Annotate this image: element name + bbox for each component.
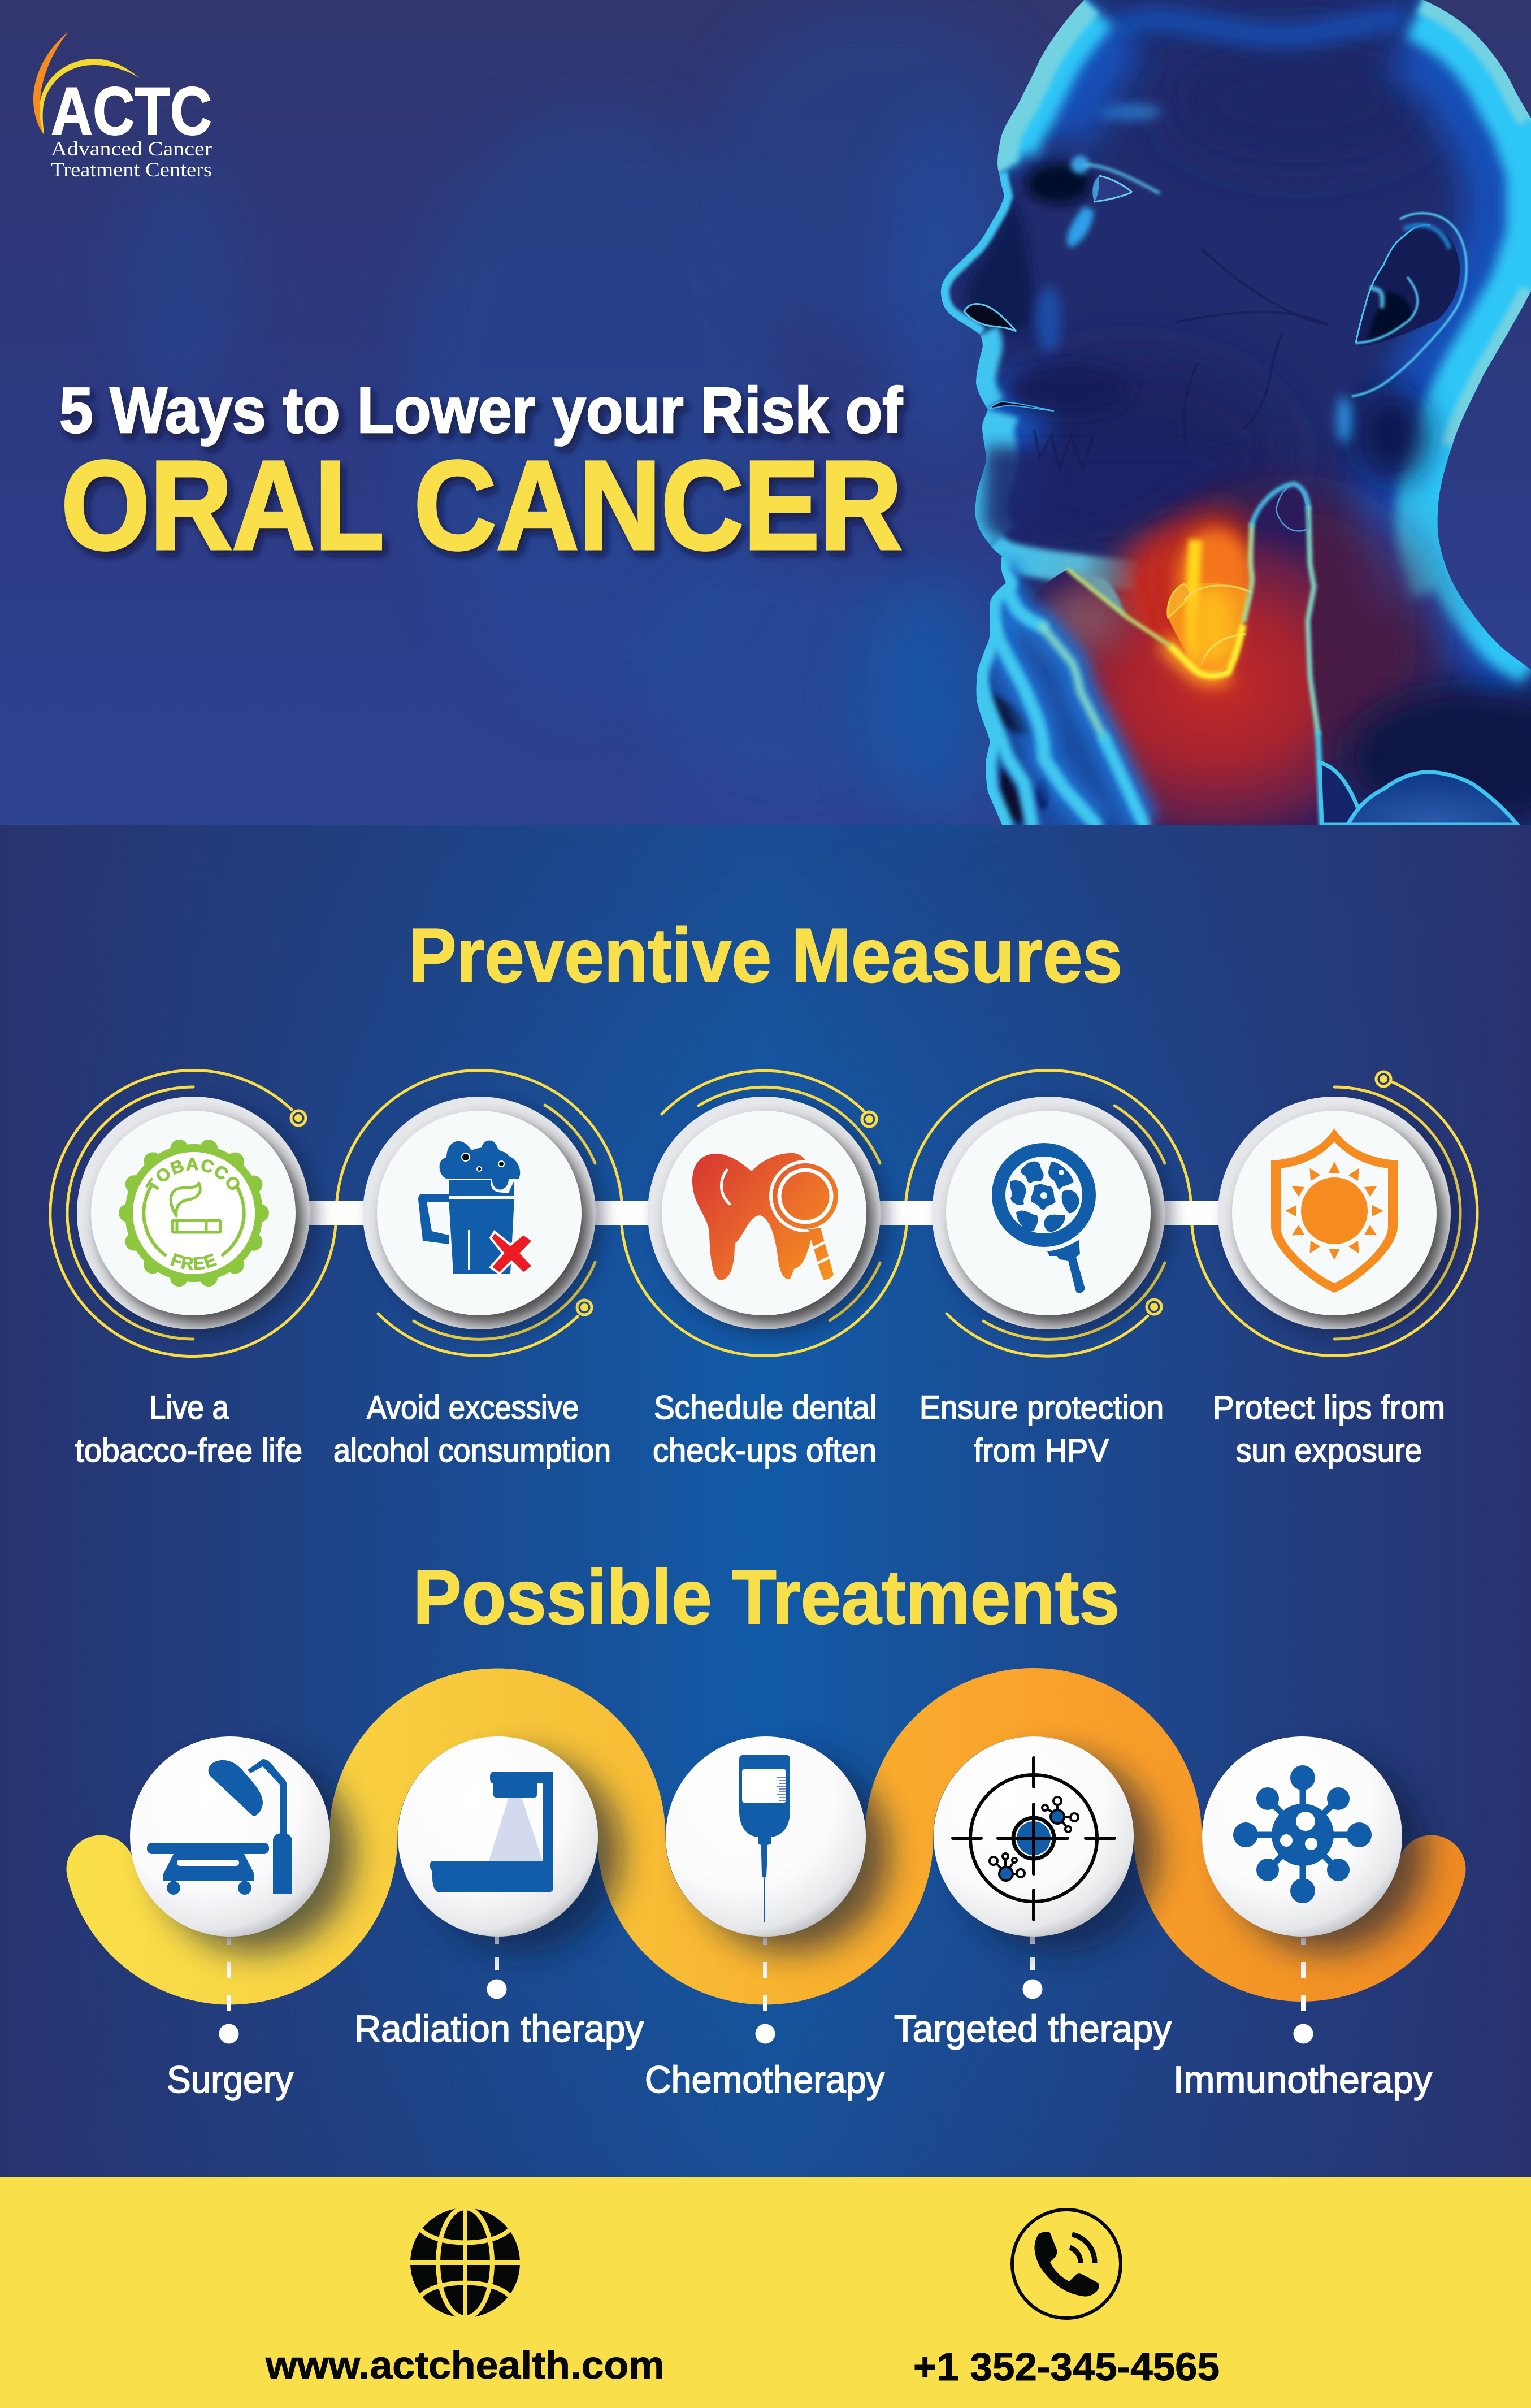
logo subtitle: Treatment Centers bbox=[51, 158, 212, 181]
icon: magnifier with cells bbox=[992, 1143, 1096, 1293]
heading: preventive measures: Preventive Measures bbox=[409, 912, 1122, 998]
icon: tobacco free badge: FREE bbox=[170, 1253, 217, 1270]
label: tobacco: tobacco-free life bbox=[75, 1432, 302, 1469]
cyan back-of-head rim bbox=[997, 0, 1531, 670]
step: tobacco-free bbox=[77, 1097, 318, 1335]
preventive measures chain bbox=[49, 1069, 1478, 1358]
label: alcohol: Avoid excessive bbox=[367, 1389, 579, 1426]
treatments wave bbox=[101, 1702, 1432, 2044]
step: alcohol bbox=[363, 1097, 604, 1335]
icon: sun shield bbox=[1271, 1128, 1398, 1293]
node: targeted bbox=[934, 1736, 1157, 1952]
label: chemotherapy: Chemotherapy bbox=[645, 2059, 884, 2101]
nose and lip rims bbox=[941, 173, 1004, 545]
thyroid glow bbox=[1168, 540, 1252, 672]
title bbox=[59, 375, 903, 576]
icon: operating table and lamp bbox=[147, 1759, 292, 1895]
fingers base bbox=[977, 573, 1144, 825]
label: tobacco bbox=[75, 1389, 302, 1469]
hand rim lines bbox=[977, 484, 1322, 825]
node: immunotherapy bbox=[1202, 1736, 1426, 1952]
chin overlay bbox=[983, 447, 1252, 545]
jaw and skull shadows bbox=[1034, 249, 1328, 469]
title line two: ORAL CANCER bbox=[61, 435, 902, 576]
icon: tooth with magnifier bbox=[692, 1153, 842, 1280]
chin rim bbox=[990, 545, 1136, 575]
title line one: 5 Ways to Lower your Risk of bbox=[59, 375, 903, 447]
icon: phone bbox=[1012, 2210, 1121, 2318]
icon: beer mug with cross bbox=[418, 1141, 533, 1274]
deep blue rim glow bbox=[975, 0, 1531, 670]
label: alcohol bbox=[333, 1389, 611, 1469]
dashed leaders bbox=[219, 1937, 1313, 2044]
illustration: head and neck with glowing throat bbox=[927, 0, 1531, 825]
label: immunotherapy: Immunotherapy bbox=[1173, 2059, 1432, 2101]
phone number: +1 352-345-4565 bbox=[913, 2345, 1220, 2389]
ear bbox=[1352, 213, 1467, 396]
label: dental: check-ups often bbox=[653, 1432, 877, 1469]
icon: radiation machine bbox=[430, 1772, 553, 1892]
preventive measure labels bbox=[75, 1389, 1445, 1469]
node: chemotherapy bbox=[666, 1736, 890, 1952]
neck maroon glow bbox=[1153, 492, 1435, 786]
label: radiation: Radiation therapy bbox=[354, 2008, 644, 2050]
node: surgery bbox=[130, 1736, 354, 1952]
molecules bbox=[990, 1797, 1078, 1881]
wave ribbon bbox=[101, 1702, 1432, 1970]
label: dental: Schedule dental bbox=[654, 1389, 877, 1426]
treatment labels bbox=[167, 2008, 1432, 2101]
deep interior shading bbox=[1164, 40, 1435, 164]
website: www.actchealth.com bbox=[265, 2343, 665, 2387]
thumbnail bbox=[1276, 484, 1308, 531]
step: sun bbox=[1218, 1097, 1459, 1335]
label: sun bbox=[1213, 1389, 1445, 1469]
label: surgery: Surgery bbox=[167, 2059, 293, 2101]
connector bar bbox=[193, 1201, 1334, 1225]
icon: IV drip bag bbox=[739, 1755, 790, 1922]
label: sun: sun exposure bbox=[1236, 1432, 1422, 1469]
mouth bbox=[990, 402, 1054, 411]
hero panel bbox=[0, 0, 1531, 825]
forehead blue band bbox=[1096, 17, 1404, 72]
label: tobacco: Live a bbox=[149, 1389, 229, 1426]
icon: tobacco free badge bbox=[125, 1144, 263, 1282]
step: HPV bbox=[932, 1097, 1173, 1335]
web glow bbox=[1164, 642, 1228, 675]
logo subtitle: Advanced Cancer bbox=[51, 137, 212, 160]
label: HPV bbox=[920, 1389, 1164, 1469]
label: sun: Protect lips from bbox=[1213, 1389, 1445, 1426]
footer panel bbox=[0, 2177, 1531, 2408]
logo wordmark: ACTC bbox=[51, 73, 212, 149]
step: dental bbox=[648, 1097, 888, 1335]
node: radiation bbox=[398, 1736, 622, 1952]
eye bbox=[1084, 165, 1160, 202]
label: targeted: Targeted therapy bbox=[894, 2008, 1172, 2050]
icon: crosshair target bbox=[953, 1758, 1114, 1920]
icon: globe bbox=[410, 2208, 520, 2318]
icon: tobacco free badge: TOBACCO bbox=[145, 1158, 240, 1190]
icon: immune cell bbox=[1233, 1765, 1372, 1903]
hand glow under rims bbox=[990, 564, 1144, 825]
logo swooshes bbox=[33, 32, 140, 135]
palm bbox=[1020, 484, 1322, 825]
logo subtitle bbox=[51, 137, 212, 181]
shoulder humps bbox=[1320, 763, 1517, 825]
pale outer edge bbox=[997, 0, 1531, 447]
heading: possible treatments: Possible Treatments bbox=[413, 1554, 1120, 1640]
logo bbox=[33, 32, 212, 181]
label: HPV: Ensure protection bbox=[920, 1389, 1164, 1426]
throat fire bbox=[1111, 526, 1252, 678]
facial dark shading bbox=[1026, 163, 1091, 204]
label: HPV: from HPV bbox=[974, 1432, 1109, 1469]
label: dental bbox=[653, 1389, 877, 1469]
decorative rings bbox=[50, 1070, 1477, 1357]
nostril bbox=[964, 304, 1016, 331]
label: alcohol: alcohol consumption bbox=[333, 1432, 611, 1469]
